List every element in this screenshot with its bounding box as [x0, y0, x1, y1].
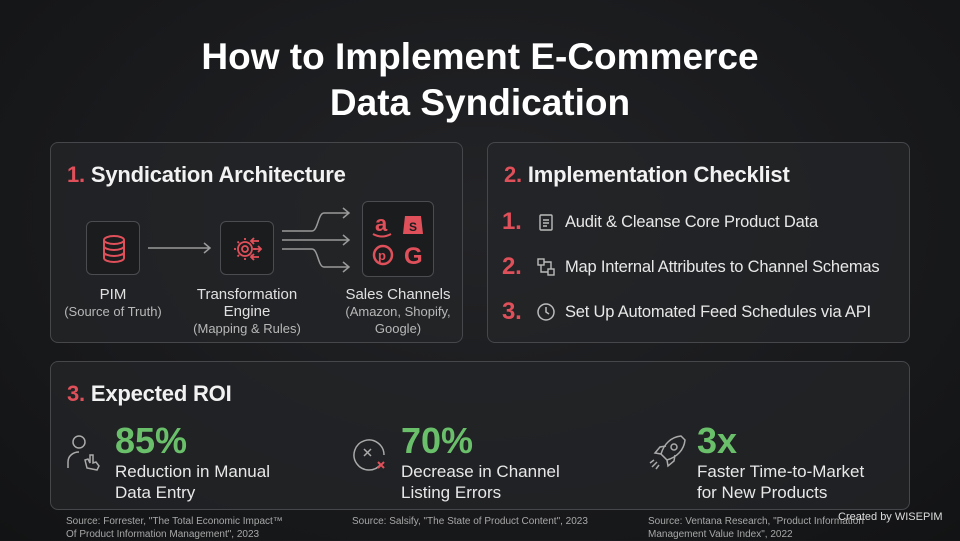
checklist item 3: 3.	[502, 298, 522, 325]
label: engine: (Mapping & Rules)	[193, 321, 301, 336]
icon: sales channels: a	[375, 211, 388, 236]
panel: implementation checklist	[487, 142, 910, 343]
stat 3: for New Products	[697, 483, 827, 502]
source 1: Source: Forrester, "The Total Economic Impact™	[66, 516, 283, 527]
heading: 2. Implementation Checklist	[504, 162, 790, 187]
title: Data Syndication	[330, 82, 630, 123]
source 1	[66, 516, 283, 540]
stat 3: Faster Time-to-Market	[697, 462, 864, 481]
heading: 1. Syndication Architecture	[67, 162, 346, 187]
stat 2: 70%	[401, 420, 473, 461]
icon: PIM database	[86, 221, 140, 275]
stat 1: Data Entry	[115, 483, 195, 502]
label: engine	[193, 286, 301, 336]
label: PIM: (Source of Truth)	[64, 304, 162, 319]
checklist item 3	[502, 298, 871, 325]
source 3	[648, 516, 864, 540]
label: channels	[345, 286, 451, 336]
stat 2	[353, 420, 560, 502]
source 1: Of Product Information Management", 2023	[66, 529, 259, 540]
arrow: PIM to engine	[148, 242, 211, 254]
title	[201, 36, 759, 123]
icon: sales channels	[362, 201, 434, 277]
label: channels: Sales Channels	[345, 286, 451, 303]
label: engine: Engine	[224, 303, 270, 320]
arrows: engine to channels	[282, 208, 350, 272]
panel: expected ROI	[50, 361, 910, 510]
icon: sales channels: S	[409, 220, 417, 234]
checklist item 1: Audit & Cleanse Core Product Data	[565, 212, 818, 230]
label: PIM	[64, 286, 162, 319]
label: channels: (Amazon, Shopify,	[345, 304, 451, 319]
icon: error x	[353, 439, 385, 471]
label: engine: Transformation	[197, 286, 297, 303]
stat 1	[67, 420, 270, 502]
checklist item 1	[502, 208, 818, 235]
icon: person hand	[67, 435, 100, 471]
source 3: Management Value Index", 2022	[648, 529, 793, 540]
stat 2: Decrease in Channel	[401, 462, 560, 481]
icon: sales channels: G	[404, 243, 423, 270]
label: PIM: PIM	[100, 286, 126, 303]
stat 3: 3x	[697, 420, 737, 461]
stat 3	[650, 420, 864, 502]
source 3: Source: Ventana Research, "Product Information	[648, 516, 864, 527]
checklist item 2	[502, 253, 879, 280]
icon: transformation engine	[220, 221, 274, 275]
credit: Created by WISEPIM	[838, 511, 943, 523]
checklist item 1: 1.	[502, 208, 522, 235]
heading: 3. Expected ROI	[67, 381, 232, 406]
label: channels: Google)	[375, 321, 421, 336]
checklist item 2: Map Internal Attributes to Channel Schemas	[565, 258, 879, 276]
panel: syndication architecture	[50, 142, 463, 343]
checklist item 2: 2.	[502, 253, 522, 280]
title: How to Implement E-Commerce	[201, 36, 759, 77]
stat 2: Listing Errors	[401, 483, 501, 502]
icon: sales channels: p	[378, 248, 386, 263]
icon: rocket	[650, 435, 686, 470]
source 2: Source: Salsify, "The State of Product Content", 2023	[352, 516, 588, 527]
stat 1: Reduction in Manual	[115, 462, 270, 481]
checklist item 3: Set Up Automated Feed Schedules via API	[565, 302, 871, 320]
stat 1: 85%	[115, 420, 187, 461]
